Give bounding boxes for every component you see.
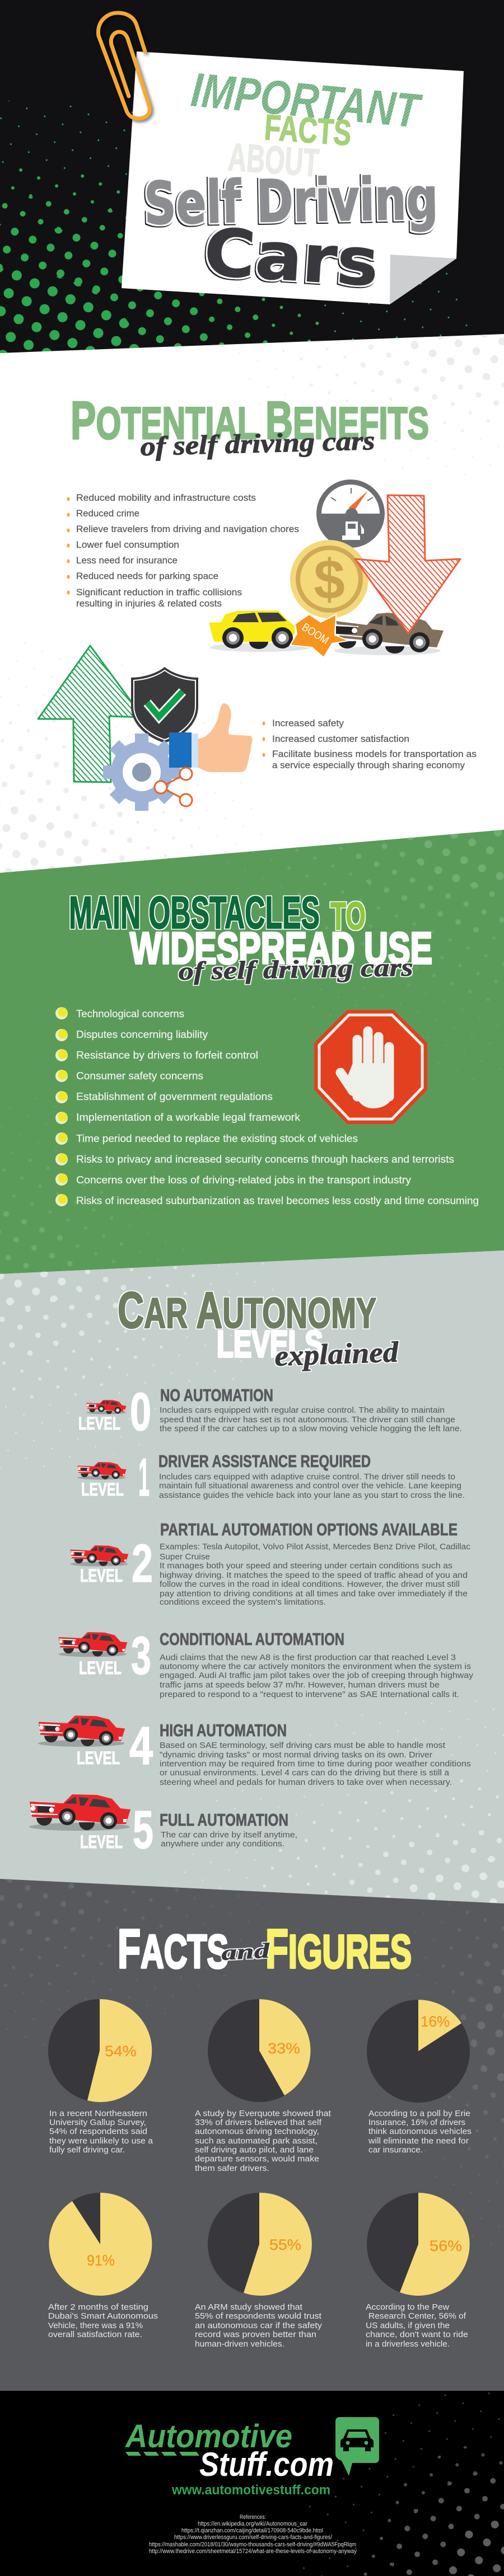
logo: Automotive Stuff bbox=[124, 2417, 379, 2483]
level 0 block bbox=[78, 1382, 462, 1442]
logo: Automotive Stuff: Stuff.com bbox=[199, 2446, 334, 2483]
level 3 block: traffic jams at speeds below 37 m/hr. However, human drivers must be bbox=[160, 1681, 440, 1690]
heading: Facts and Figures: FACTS bbox=[118, 1918, 228, 1980]
text: references bbox=[149, 2514, 357, 2555]
fact text: Pew: Research Center, 56% of bbox=[368, 2311, 466, 2321]
level 3 block bbox=[58, 1626, 474, 1699]
list: benefits: Less need for insurance bbox=[76, 556, 178, 566]
fact text: Pew: chance, don't want to ride bbox=[366, 2330, 468, 2339]
icon: level 5 car bbox=[29, 1794, 130, 1831]
heading: Facts and Figures: FIGURES bbox=[265, 1918, 412, 1980]
fact text: Pew: in a driverless vehicle. bbox=[366, 2339, 450, 2349]
fact text: Northeastern: 54% of respondents said bbox=[49, 2127, 147, 2136]
fact text: ARM: record was proven better than bbox=[195, 2330, 316, 2339]
level 2 block: follow the curves in the road in ideal conditions. However, the driver must still bbox=[160, 1580, 460, 1589]
text: references: https://t.qianzhan.com/caijing/detail/170908-540c9bde.html bbox=[181, 2527, 323, 2534]
title: Facts: FACTS bbox=[263, 107, 353, 153]
list: obstacles: Risks of increased suburbanization as travel becomes less costly and time consuming bbox=[76, 1195, 479, 1206]
fact text: Everquote: such as automated park assist, bbox=[195, 2136, 318, 2146]
icon: brown car bbox=[334, 613, 444, 655]
level 0 block: LEVEL bbox=[78, 1413, 120, 1433]
fact text: Dubai: After 2 months of testing bbox=[48, 2302, 148, 2312]
fact text: Everquote: 33% of drivers believed that self bbox=[195, 2118, 322, 2127]
heading: Car Autonomy Levels explained: CAR AUTONOMY bbox=[118, 1282, 376, 1339]
sticky note paper bbox=[122, 51, 464, 304]
list: obstacles: Concerns over the loss of driving-related jobs in the transport industry bbox=[76, 1174, 411, 1186]
text: website url: www.automotivestuff.com bbox=[171, 2483, 330, 2498]
list: benefits: Reduced needs for parking space bbox=[76, 571, 218, 581]
heading: Car Autonomy Levels explained bbox=[118, 1282, 399, 1372]
icon: paperclip bbox=[98, 13, 150, 119]
heading: Facts and Figures: and bbox=[221, 1939, 271, 1965]
icon: level 3 car bbox=[58, 1632, 127, 1657]
level 4 block: HIGH AUTOMATION bbox=[160, 1721, 287, 1740]
list: obstacles: Consumer safety concerns bbox=[76, 1070, 203, 1082]
text: references: http://www.thedrive.com/sheetmetal/15724/what-are-these-levels-of-autonomy-anyway bbox=[149, 2548, 357, 2555]
level 1 block: assistance guides the vehicle back into your lane as you start to cross the line. bbox=[159, 1491, 465, 1500]
list: obstacles: Resistance by drivers to forfeit control bbox=[76, 1050, 258, 1061]
level 3 block: CONDITIONAL AUTOMATION bbox=[160, 1629, 344, 1649]
icon: green location pin with car bbox=[335, 2417, 379, 2476]
level 2 block: 2 bbox=[132, 1534, 153, 1593]
level 5 block: LEVEL bbox=[80, 1832, 123, 1852]
fact text: Pew: US adults, if given the bbox=[366, 2321, 450, 2330]
level 1 block: maintain full situational awareness and control over the vehicle. Lane keeping bbox=[159, 1482, 461, 1491]
level 0 block: the speed if the car catches up to a slow moving vehicle hogging the left lane. bbox=[160, 1425, 462, 1433]
fact text: Northeastern: In a recent Northeastern bbox=[49, 2109, 147, 2118]
level 5 block bbox=[29, 1794, 297, 1860]
icon: fuel gauge bbox=[316, 480, 385, 548]
level 1 block: LEVEL bbox=[81, 1479, 124, 1499]
level 4 block: "dynamic driving tasks" or most normal driving tasks on its own. Driver bbox=[160, 1751, 432, 1760]
list: obstacles bbox=[55, 1007, 479, 1206]
level 0 block: NO AUTOMATION bbox=[160, 1385, 273, 1405]
chart: pie 56% bbox=[367, 2193, 470, 2296]
icon: red hatched down arrow bbox=[355, 495, 460, 633]
title: Important: IMPORTANT bbox=[189, 63, 424, 139]
fact text: Erie Insurance: Insurance, 16% of drivers bbox=[368, 2118, 465, 2127]
list: obstacles: Establishment of government regulations bbox=[76, 1091, 273, 1102]
text: references: References: bbox=[240, 2514, 266, 2521]
level 2 block bbox=[70, 1520, 470, 1607]
fact text: Dubai bbox=[48, 2302, 158, 2339]
heading: Car Autonomy Levels explained: LEVELS bbox=[217, 1323, 323, 1365]
level 4 block bbox=[38, 1715, 471, 1787]
fact text: ARM: 55% of respondents would trust bbox=[195, 2311, 322, 2321]
level 3 block: Audi claims that the new A8 is the first production car that reached Level 3 bbox=[160, 1653, 456, 1662]
fact text: ARM: human-driven vehicles. bbox=[195, 2339, 284, 2349]
icon: stop sign with hand bbox=[314, 1010, 427, 1124]
icon: gold coin: $ bbox=[314, 548, 345, 611]
fact text: Erie Insurance: car insurance. bbox=[368, 2145, 423, 2155]
list: more benefits: Facilitate business models for transportation as bbox=[272, 749, 477, 759]
fact text: Everquote: autonomous driving technology, bbox=[195, 2127, 319, 2136]
list: obstacles: Time period needed to replace the existing stock of vehicles bbox=[76, 1133, 358, 1144]
level 4 block: or unusual environments. Level 4 cars can do the driving but there is still a bbox=[160, 1769, 450, 1778]
level 4 block: 4 bbox=[129, 1716, 153, 1776]
chart: pie 33% bbox=[208, 1999, 311, 2102]
fact text: Everquote: A study by Everquote showed that bbox=[195, 2109, 332, 2118]
text: references: https://www.driverlessguru.com/self-driving-cars-facts-and-figures/ bbox=[174, 2534, 333, 2541]
level 3 block: 3 bbox=[131, 1626, 151, 1686]
fact text: Northeastern: they were unlikely to use a bbox=[49, 2136, 153, 2146]
level 0 block: Includes cars equipped with regular cruise control. The ability to maintain bbox=[160, 1406, 445, 1415]
text: references: https://en.wikipedia.org/wiki/Autonomous_car bbox=[198, 2521, 307, 2527]
fact text: ARM bbox=[195, 2302, 323, 2349]
level 2 block: It manages both your speed and steering under certain conditions such as bbox=[160, 1562, 452, 1571]
list: benefits: Relieve travelers from driving and navigation chores bbox=[76, 524, 299, 534]
fact text: Northeastern bbox=[49, 2109, 153, 2155]
list: benefits: Reduced mobility and infrastructure costs bbox=[76, 493, 256, 503]
icon: green hatched up arrow bbox=[38, 646, 143, 782]
level 1 block: Includes cars equipped with adaptive cruise control. The driver still needs to bbox=[159, 1473, 455, 1482]
list: more benefits: a service especially through sharing economy bbox=[272, 760, 465, 770]
heading: Car Autonomy Levels explained: explained bbox=[274, 1336, 399, 1372]
heading: Main Obstacles to Widespread Use: of self driving cars bbox=[178, 953, 413, 985]
level 2 block: pay attention to driving conditions at all times and take over immediately if the bbox=[160, 1590, 468, 1599]
fact text: Erie Insurance bbox=[368, 2109, 472, 2155]
level 2 block: Examples: Tesla Autopilot, Volvo Pilot Assist, Mercedes Benz Drive Pilot, Cadillac bbox=[160, 1543, 470, 1552]
fact text: Northeastern: University Gallup Survey, bbox=[49, 2118, 146, 2127]
icon: level 4 car bbox=[38, 1715, 125, 1747]
chart: pie 16% bbox=[367, 2000, 470, 2103]
level 0 block: 0 bbox=[130, 1382, 151, 1442]
fact text: Everquote: departure sensors, would make bbox=[195, 2154, 319, 2164]
list: benefits bbox=[67, 493, 299, 609]
chart: pie 54% bbox=[48, 1999, 152, 2102]
chart: pie 16%: 16% bbox=[421, 2013, 450, 2030]
icon: boom explosion: BOOM bbox=[300, 621, 331, 647]
level 5 block: The car can drive by itself anytime, bbox=[161, 1831, 297, 1840]
heading: Main Obstacles to Widespread Use: TO bbox=[330, 894, 366, 938]
fact text: Pew: According to the Pew bbox=[366, 2302, 449, 2312]
level 3 block: engaged. Audi AI traffic jam pilot takes over the job of creeping through highway bbox=[160, 1671, 474, 1680]
fact text: Dubai: Dubai's Smart Autonomous bbox=[48, 2311, 158, 2321]
icon: boom explosion bbox=[290, 614, 349, 657]
fact text: ARM: an autonomous car if the safety bbox=[195, 2321, 323, 2330]
icon: level 1 car bbox=[77, 1462, 127, 1479]
level 5 block: FULL AUTOMATION bbox=[160, 1810, 288, 1830]
level 3 block: autonomy where the car actively monitors the environment when the system is bbox=[160, 1662, 471, 1671]
icon: gear bbox=[103, 734, 180, 811]
list: benefits: resulting in injuries & related costs bbox=[76, 599, 222, 609]
icon: thumbs up hand bbox=[169, 703, 252, 772]
title: About: ABOUT bbox=[227, 135, 320, 185]
list: benefits: Lower fuel consumption bbox=[76, 540, 179, 550]
fact text: Everquote bbox=[195, 2109, 332, 2173]
fact text: Dubai: overall satisfaction rate. bbox=[48, 2330, 142, 2339]
panel: green obstacles background bbox=[0, 830, 504, 1274]
icon: safety shield with check bbox=[131, 667, 198, 743]
folded corner bbox=[390, 255, 456, 304]
icon: yellow car bbox=[209, 610, 311, 652]
level 0 block: speed that the driver has set is not autonomous. The driver can still change bbox=[160, 1416, 455, 1425]
heading: Main Obstacles to Widespread Use: MAIN OBSTACLES bbox=[69, 887, 320, 938]
level 4 block: Based on SAE terminology, self driving cars must be able to handle most bbox=[160, 1741, 445, 1750]
panel: header black background bbox=[0, 0, 504, 353]
icon: level 0 car bbox=[86, 1400, 126, 1414]
fact text: Erie Insurance: think autonomous vehicles bbox=[368, 2127, 472, 2136]
level 2 block: Super Cruise bbox=[160, 1553, 210, 1562]
level 1 block: 1 bbox=[138, 1447, 150, 1507]
title: Cars: Cars bbox=[202, 213, 381, 302]
icon: gold coin bbox=[290, 540, 368, 618]
list: obstacles: Technological concerns bbox=[76, 1008, 184, 1019]
list: obstacles: Disputes concerning liability bbox=[76, 1029, 208, 1040]
logo: Automotive Stuff: Automotive bbox=[124, 2418, 292, 2455]
chart: pie 54%: 54% bbox=[105, 2043, 137, 2060]
text: references: https://mashable.com/2018/01/30/waymo-thousands-cars-self-driving/#9dWA5FpqRlqm bbox=[149, 2541, 356, 2548]
list: benefits: Reduced crime bbox=[76, 509, 139, 519]
list: more benefits: Increased safety bbox=[272, 718, 344, 728]
chart: pie 91% bbox=[49, 2193, 152, 2296]
level 1 block: DRIVER ASSISTANCE REQUIRED bbox=[158, 1451, 371, 1471]
level 4 block: intervention may be required from time to time during poor weather conditions bbox=[160, 1760, 471, 1769]
list: more benefits bbox=[262, 718, 477, 770]
level 3 block: prepared to respond to a "request to intervene" as SAE International calls it. bbox=[160, 1690, 459, 1699]
subheading: of self driving cars: of self driving cars bbox=[140, 426, 375, 462]
list: benefits: Significant reduction in traffic collisions bbox=[76, 587, 242, 598]
fact text: Everquote: them safer drivers. bbox=[195, 2164, 269, 2173]
chart: pie 55% bbox=[208, 2193, 312, 2296]
list: obstacles: Risks to privacy and increased security concerns through hackers and terrorists bbox=[76, 1154, 454, 1165]
heading: Potential Benefits: POTENTIAL BENEFITS bbox=[71, 391, 429, 450]
level 3 block: LEVEL bbox=[79, 1658, 122, 1678]
chart: pie 91%: 91% bbox=[87, 2252, 115, 2269]
panel: gray autonomy levels background bbox=[0, 1251, 504, 1903]
panel: black footer background bbox=[0, 2391, 504, 2576]
fact text: Pew bbox=[366, 2302, 468, 2349]
level 2 block: conditions exceed the system's limitations. bbox=[160, 1598, 326, 1607]
level 5 block: anywhere under any conditions. bbox=[161, 1840, 284, 1849]
level 2 block: highway driving. It matches the speed to the speed of traffic ahead of you and bbox=[160, 1571, 468, 1580]
fact text: Erie Insurance: will eliminate the need for bbox=[368, 2136, 469, 2146]
fact text: Dubai: Vehicle, there was a 91% bbox=[48, 2321, 143, 2330]
panel: dark facts background bbox=[0, 1879, 504, 2391]
level 2 block: LEVEL bbox=[80, 1566, 123, 1586]
level 4 block: steering wheel and pedals for human drivers to take over when necessary. bbox=[160, 1778, 452, 1787]
icon: sticky note with paperclip and title bbox=[98, 13, 464, 304]
level 5 block: 5 bbox=[133, 1800, 153, 1860]
list: more benefits: Increased customer satisfaction bbox=[272, 734, 409, 744]
level 4 block: LEVEL bbox=[77, 1748, 120, 1768]
panel: white benefits background bbox=[0, 330, 504, 878]
icon: orange share network bbox=[155, 768, 192, 806]
fact text: ARM: An ARM study showed that bbox=[195, 2302, 303, 2312]
fact text: Everquote: self driving auto pilot, and lane bbox=[195, 2145, 314, 2155]
chart: pie 55%: 55% bbox=[269, 2236, 301, 2253]
fact text: Northeastern: fully self driving car. bbox=[49, 2145, 125, 2155]
chart: pie 56%: 56% bbox=[430, 2237, 462, 2254]
chart: pie 33%: 33% bbox=[268, 2040, 300, 2057]
icon: level 2 car bbox=[70, 1545, 128, 1566]
heading: Main Obstacles to Widespread Use bbox=[69, 887, 432, 985]
list: obstacles: Implementation of a workable legal framework bbox=[76, 1112, 301, 1123]
fact text: Erie Insurance: According to a poll by Erie bbox=[368, 2109, 470, 2118]
heading: Facts and Figures bbox=[118, 1918, 412, 1980]
level 1 block bbox=[77, 1447, 465, 1507]
